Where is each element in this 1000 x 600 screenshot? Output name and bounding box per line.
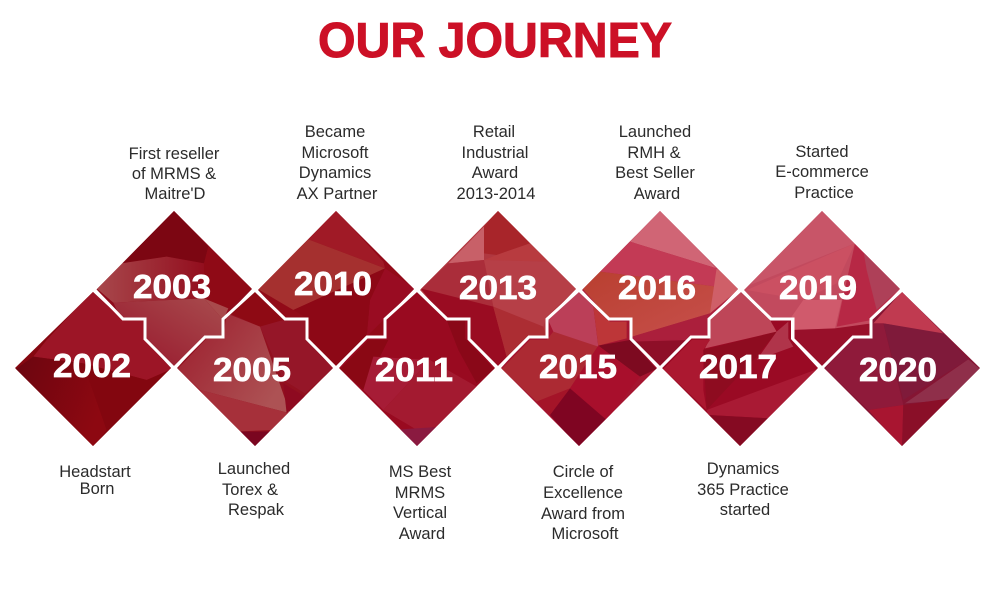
timeline tile: 2003	[96, 211, 252, 366]
timeline tile: 2010	[258, 211, 414, 366]
timeline tile: 2016	[582, 211, 738, 366]
label: MS Best: Vertical	[393, 504, 447, 522]
label: MS Best: Award	[399, 525, 445, 543]
label: Became Microsoft: Microsoft	[302, 144, 369, 162]
timeline tile: 2005	[177, 292, 333, 446]
label: Started E-commerce: Practice	[794, 184, 854, 202]
timeline tile: 2019: 2019	[779, 269, 857, 306]
label: Became Microsoft: Became	[305, 123, 365, 141]
label: Circle of Excellence: Award from	[541, 505, 625, 523]
label: Retail Industrial: 2013-2014	[457, 185, 535, 203]
timeline tile: 2011: 2011	[375, 351, 453, 388]
timeline tile: 2016: 2016	[618, 269, 696, 306]
timeline tile: 2015: 2015	[539, 348, 617, 385]
timeline tile: 2010: 2010	[294, 265, 372, 302]
label: Headstart Born: Headstart	[59, 463, 131, 481]
timeline tile: 2013: 2013	[459, 269, 537, 306]
label: MS Best: MRMS	[395, 484, 445, 502]
label: Circle of Excellence: Microsoft	[552, 525, 619, 543]
label: Became Microsoft: AX Partner	[297, 185, 378, 203]
timeline tile: 2002	[15, 292, 171, 446]
label: Circle of Excellence: Circle of	[553, 463, 614, 481]
timeline tile: 2003: 2003	[133, 268, 211, 305]
label: Retail Industrial: Industrial	[462, 144, 528, 162]
label: Launched RMH: Launched	[619, 123, 691, 141]
label: Started E-commerce: E-commerce	[775, 163, 869, 181]
label: Launched RMH: Best Seller	[615, 164, 695, 182]
label: Circle of Excellence: Excellence	[543, 484, 623, 502]
label: Launched RMH: RMH &	[627, 144, 681, 162]
timeline tile: 2005: 2005	[213, 351, 291, 388]
timeline tile: 2015	[501, 292, 657, 446]
label: Retail Industrial: Retail	[473, 123, 515, 141]
label: First reseller: First reseller	[129, 145, 220, 163]
label: Dynamics 365: 365 Practice	[697, 481, 789, 499]
timeline tile: 2002: 2002	[53, 347, 131, 384]
timeline tile: 2020: 2020	[859, 351, 937, 388]
label: Dynamics 365: Dynamics	[707, 460, 779, 478]
timeline tile: 2017: 2017	[699, 348, 777, 385]
label: Launched Torex: Launched	[218, 460, 290, 478]
timeline tile: 2017	[662, 292, 818, 446]
label: Became Microsoft: Dynamics	[299, 164, 371, 182]
label: Started E-commerce: Started	[795, 143, 849, 161]
label: Retail Industrial: Award	[472, 164, 518, 182]
label: Dynamics 365: started	[720, 501, 770, 519]
timeline tile: 2013	[420, 211, 576, 366]
title: OUR JOURNEY	[318, 14, 672, 68]
label: Launched Torex: Respak	[228, 501, 285, 519]
timeline tile: 2011	[339, 292, 495, 446]
label: Launched Torex: Torex &	[222, 481, 278, 499]
label: First reseller: of MRMS &	[132, 165, 216, 183]
label: First reseller: Maitre'D	[145, 185, 206, 203]
label: MS Best: MS Best	[389, 463, 452, 481]
timeline tile: 2019	[744, 211, 900, 366]
label: Headstart Born: Born	[80, 480, 114, 498]
timeline tile: 2020	[824, 292, 980, 446]
label: Launched RMH: Award	[634, 185, 680, 203]
